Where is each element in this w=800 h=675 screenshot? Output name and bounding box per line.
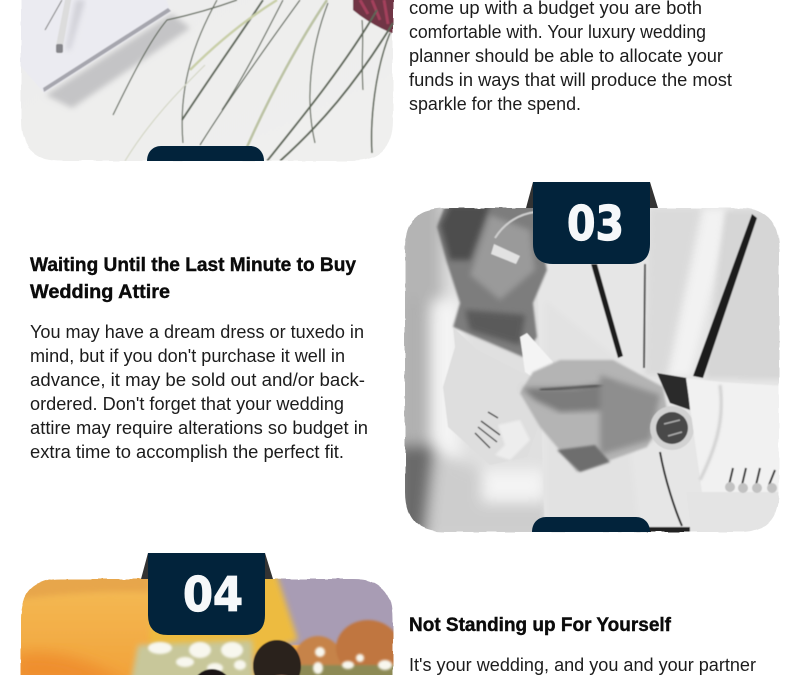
upper hand [437,200,547,357]
text block: budget paragraph: sparkle for the spend. [409,94,581,114]
text block: budget paragraph [409,0,732,114]
jacket [544,510,546,516]
text block: standing up paragraph: It's your wedding, and you and your partner [409,655,756,675]
white flowers [130,640,255,675]
text block: budget paragraph: planner should be able to allocate your [409,46,723,66]
text block: wedding attire paragraph: You may have a dream dress or tuxedo in [30,322,364,342]
text block: wedding attire paragraph: advance, it may be sold out and/or back- [30,370,365,390]
number tab: 04: 04 [183,568,243,623]
icon: wristwatch [650,373,694,526]
icon: pen [56,0,72,53]
number tab: 03 [526,182,658,264]
number tab bottom: photo 1 [147,146,264,161]
lapel stripes [591,214,757,378]
panel: couple in autumn field photo [20,578,394,675]
autumn trees [294,620,400,675]
ring [491,212,535,264]
panel: photo of notebook and grass blades [20,0,394,162]
text block: wedding attire paragraph: attire may require alterations so budget in [30,418,368,438]
grass blades [113,0,393,161]
icon: burgundy flower [352,0,394,34]
lower hand [520,360,667,472]
woman's hair [193,669,231,675]
icon: notebook [42,8,171,92]
heading: not standing up for yourself: Not Standing up For Yourself [409,614,671,636]
heading: waiting until the last minute: Waiting Until the Last Minute to Buy [30,254,356,276]
blurred window background [404,208,544,532]
heading: waiting until the last minute [30,254,356,303]
text block: wedding attire paragraph [30,322,368,462]
shirt cuff [443,327,553,465]
text block: wedding attire paragraph: ordered. Don't forget that your wedding [30,394,344,414]
number tab: 03: 03 [567,197,624,252]
text block: wedding attire paragraph: extra time to accomplish the perfect fit. [30,442,344,462]
man's head [253,640,301,675]
text block: wedding attire paragraph: mind, but if you don't purchase it well in [30,346,345,366]
number tab bottom: photo 3 [532,517,650,532]
text block: budget paragraph: funds in ways that will produce the most [409,70,732,90]
panel: black and white photo of groom adjusting cuff [404,207,780,533]
text block: budget paragraph: comfortable with. Your luxury wedding [409,22,706,42]
heading: waiting until the last minute: Wedding Attire [30,281,170,303]
right shirt cuff and sleeve [686,378,785,492]
number tab: 04 [141,553,273,635]
